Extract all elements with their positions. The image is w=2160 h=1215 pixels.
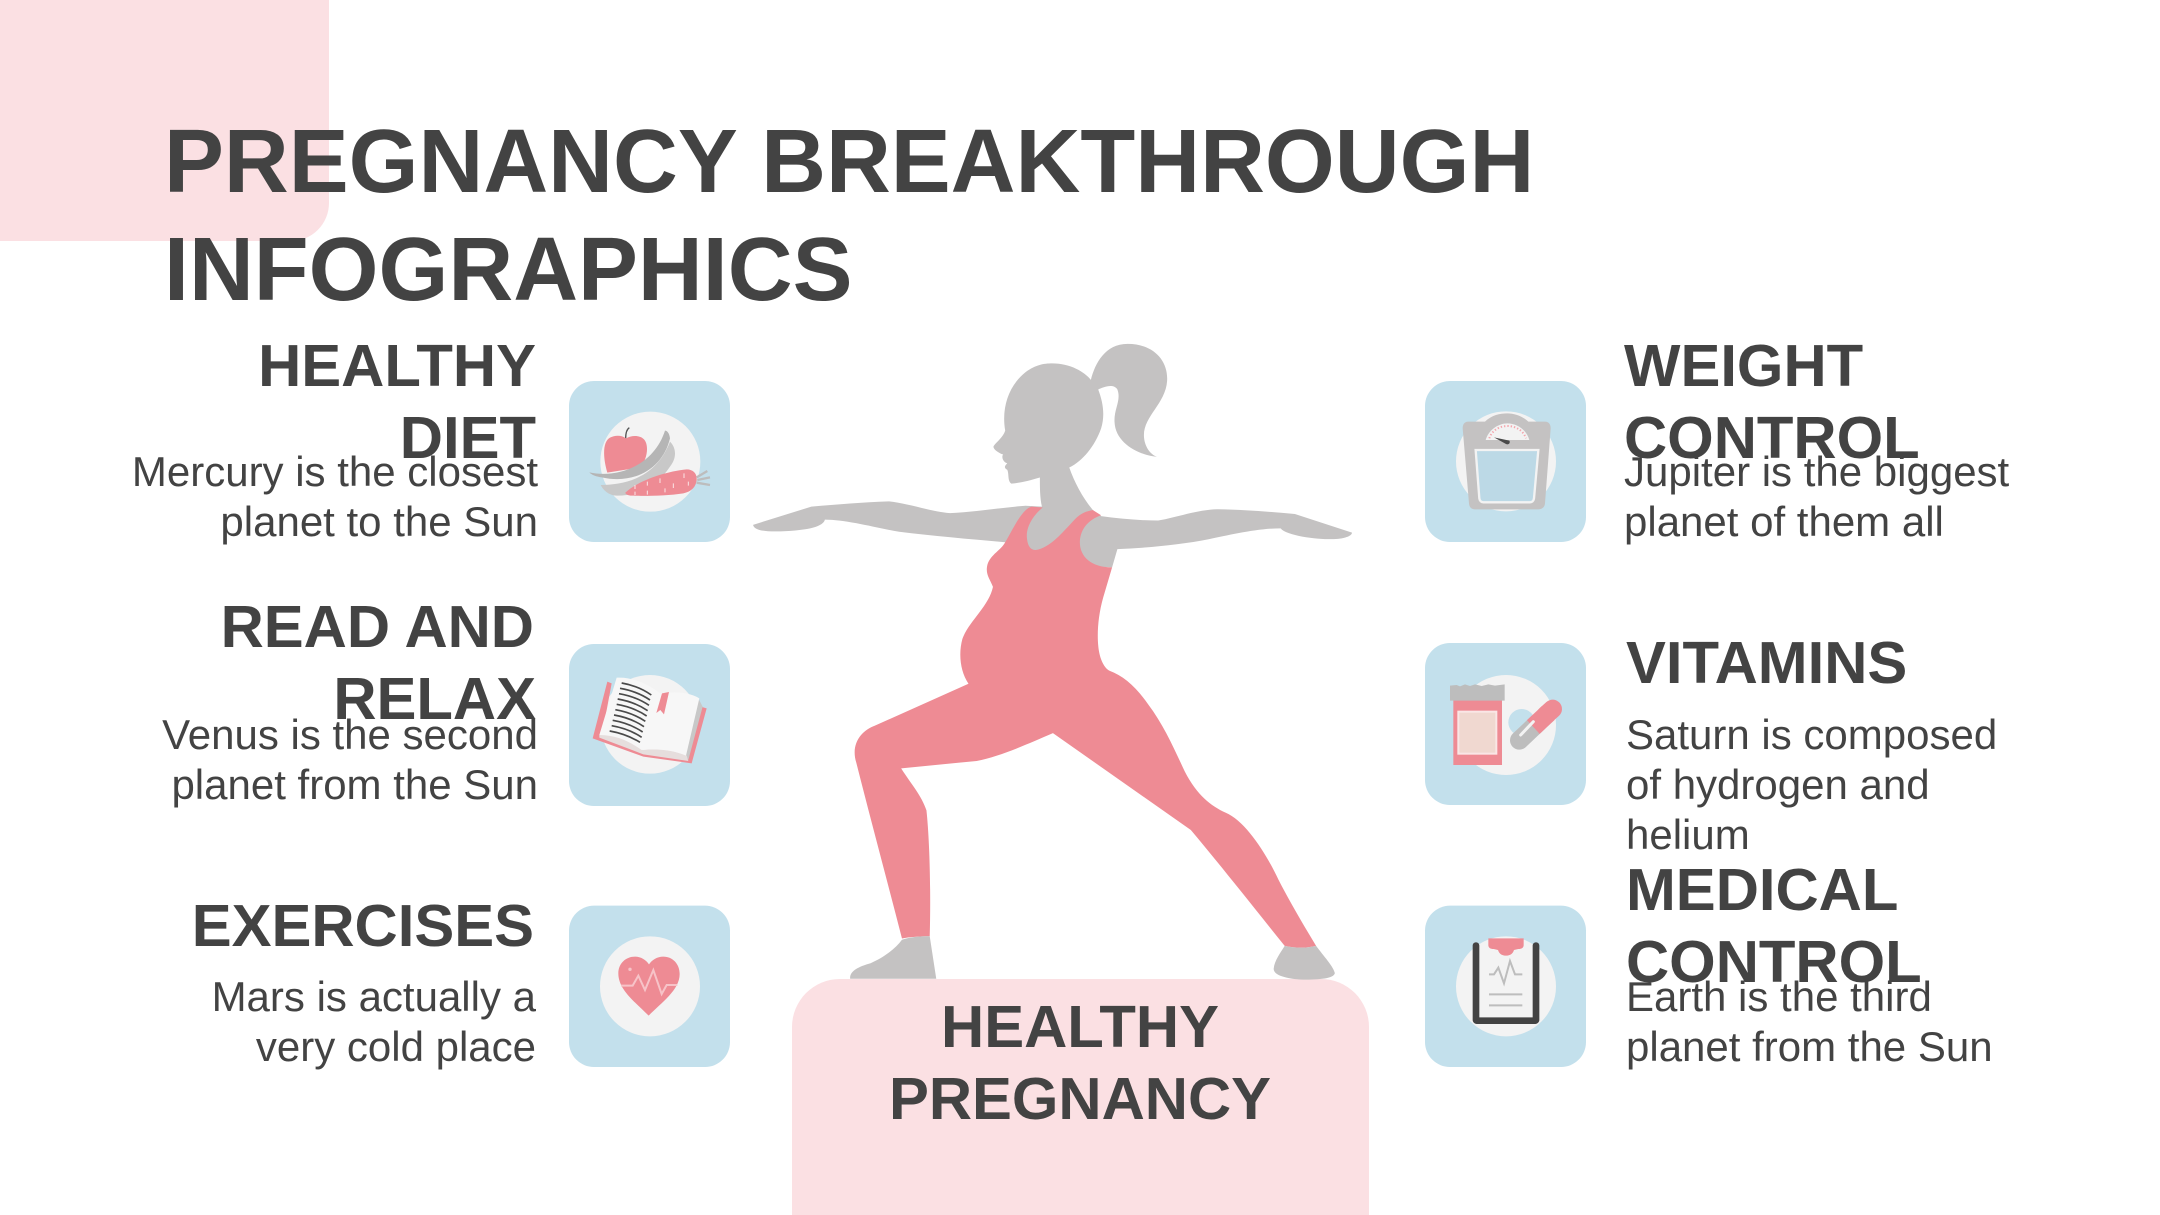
base panel label: PREGNANCY xyxy=(889,1065,1271,1132)
heading: weight control: CONTROL xyxy=(1624,404,1920,471)
text: healthy diet: Mercury is the closest xyxy=(132,448,538,495)
item: weight control xyxy=(1624,332,2010,545)
text: vitamins: of hydrogen and xyxy=(1626,761,1930,808)
item: read and relax xyxy=(162,593,538,808)
title: INFOGRAPHICS xyxy=(164,220,852,320)
text: exercises: very cold place xyxy=(256,1023,536,1070)
item: exercises xyxy=(192,892,537,1070)
heading: medical control: MEDICAL xyxy=(1626,856,1898,923)
item: medical control xyxy=(1626,856,1993,1070)
icon: medical clipboard xyxy=(1425,906,1586,1067)
text: exercises: Mars is actually a xyxy=(212,973,536,1020)
icon: fruit and vegetables xyxy=(569,381,730,542)
heading: read and relax: RELAX xyxy=(333,665,536,732)
icon: vitamins bottle and capsule xyxy=(1425,643,1586,805)
text: medical control: planet from the Sun xyxy=(1626,1023,1993,1070)
text: read and relax: planet from the Sun xyxy=(171,761,538,808)
text: vitamins: Saturn is composed xyxy=(1626,711,1997,758)
text: healthy diet: planet to the Sun xyxy=(220,498,538,545)
heading: read and relax: READ AND xyxy=(221,593,534,660)
heading: vitamins: VITAMINS xyxy=(1626,629,1907,696)
title: PREGNANCY BREAKTHROUGH xyxy=(164,112,1534,212)
item: healthy diet xyxy=(132,332,538,545)
icon: heart with pulse xyxy=(569,906,730,1067)
panel: healthy pregnancy base xyxy=(792,979,1369,1215)
text: medical control: Earth is the third xyxy=(1626,973,1932,1020)
pregnant woman yoga figure xyxy=(753,344,1352,980)
base panel label: HEALTHY xyxy=(941,993,1219,1060)
text: weight control: planet of them all xyxy=(1624,498,1944,545)
heading: healthy diet: DIET xyxy=(400,404,536,471)
icon: open book xyxy=(569,644,730,806)
item: vitamins xyxy=(1626,629,1997,858)
heading: medical control: CONTROL xyxy=(1626,928,1922,995)
heading: weight control: WEIGHT xyxy=(1624,332,1863,399)
text: weight control: Jupiter is the biggest xyxy=(1624,448,2009,495)
text: vitamins: helium xyxy=(1626,811,1750,858)
heading: healthy diet: HEALTHY xyxy=(258,332,536,399)
decorative pink corner panel xyxy=(0,0,329,241)
heading: exercises: EXERCISES xyxy=(192,892,534,959)
text: read and relax: Venus is the second xyxy=(162,711,538,758)
icon: weight scale xyxy=(1425,381,1586,542)
